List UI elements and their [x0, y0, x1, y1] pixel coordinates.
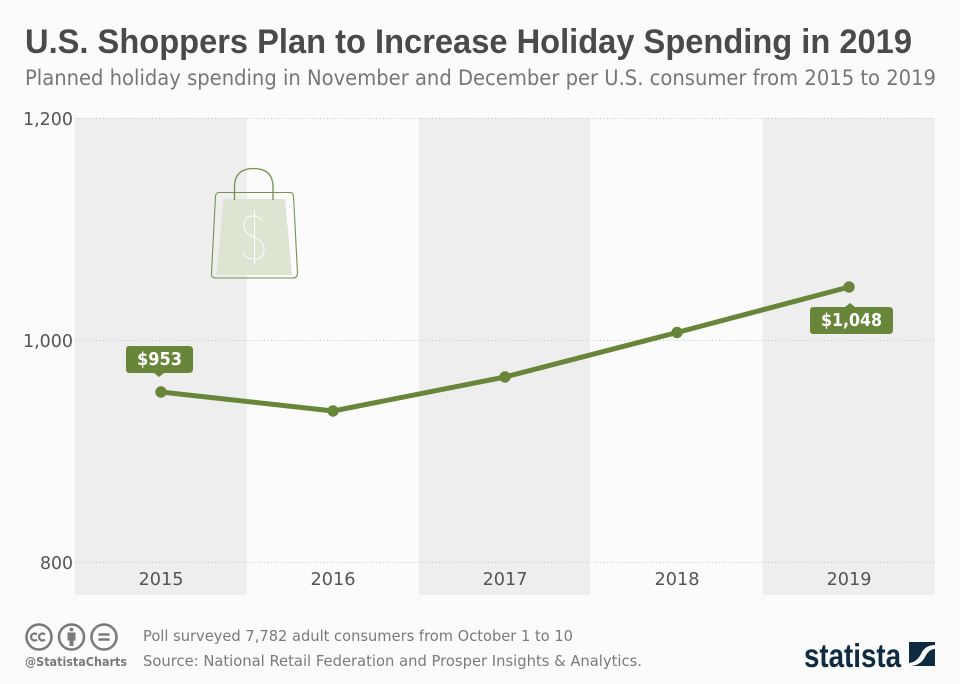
line chart — [23, 109, 935, 595]
y axis labels: 1,200 — [23, 109, 73, 130]
icon: shopping bag with dollar sign — [211, 168, 298, 278]
data points — [155, 281, 855, 417]
y axis labels: 1,000 — [23, 331, 73, 352]
credit handle: @StatistaCharts — [25, 655, 127, 669]
source notes: Source: National Retail Federation and Prosper Insights & Analytics. — [143, 652, 642, 670]
x axis labels: 2015 — [138, 569, 184, 590]
callout: 2015 value: $953 — [137, 349, 182, 370]
source notes: Poll surveyed 7,782 adult consumers from October 1 to 10 — [143, 627, 573, 645]
alternating year bands — [75, 118, 935, 595]
statista logo: statista — [804, 637, 902, 674]
icon: creative commons licence — [26, 624, 116, 650]
x axis labels: 2017 — [482, 569, 528, 590]
x axis labels: 2016 — [310, 569, 356, 590]
callout: 2015 value — [126, 346, 193, 377]
x axis labels: 2019 — [826, 569, 872, 590]
source notes — [143, 627, 642, 670]
y axis labels — [23, 109, 73, 574]
x axis labels: 2018 — [654, 569, 700, 590]
y axis labels: 800 — [40, 553, 73, 574]
title: U.S. Shoppers Plan to Increase Holiday Spending in 2019 — [25, 23, 912, 61]
x axis labels — [138, 569, 872, 590]
callout: 2019 value — [810, 303, 893, 334]
data line — [161, 287, 849, 411]
callout: 2019 value: $1,048 — [821, 310, 882, 331]
